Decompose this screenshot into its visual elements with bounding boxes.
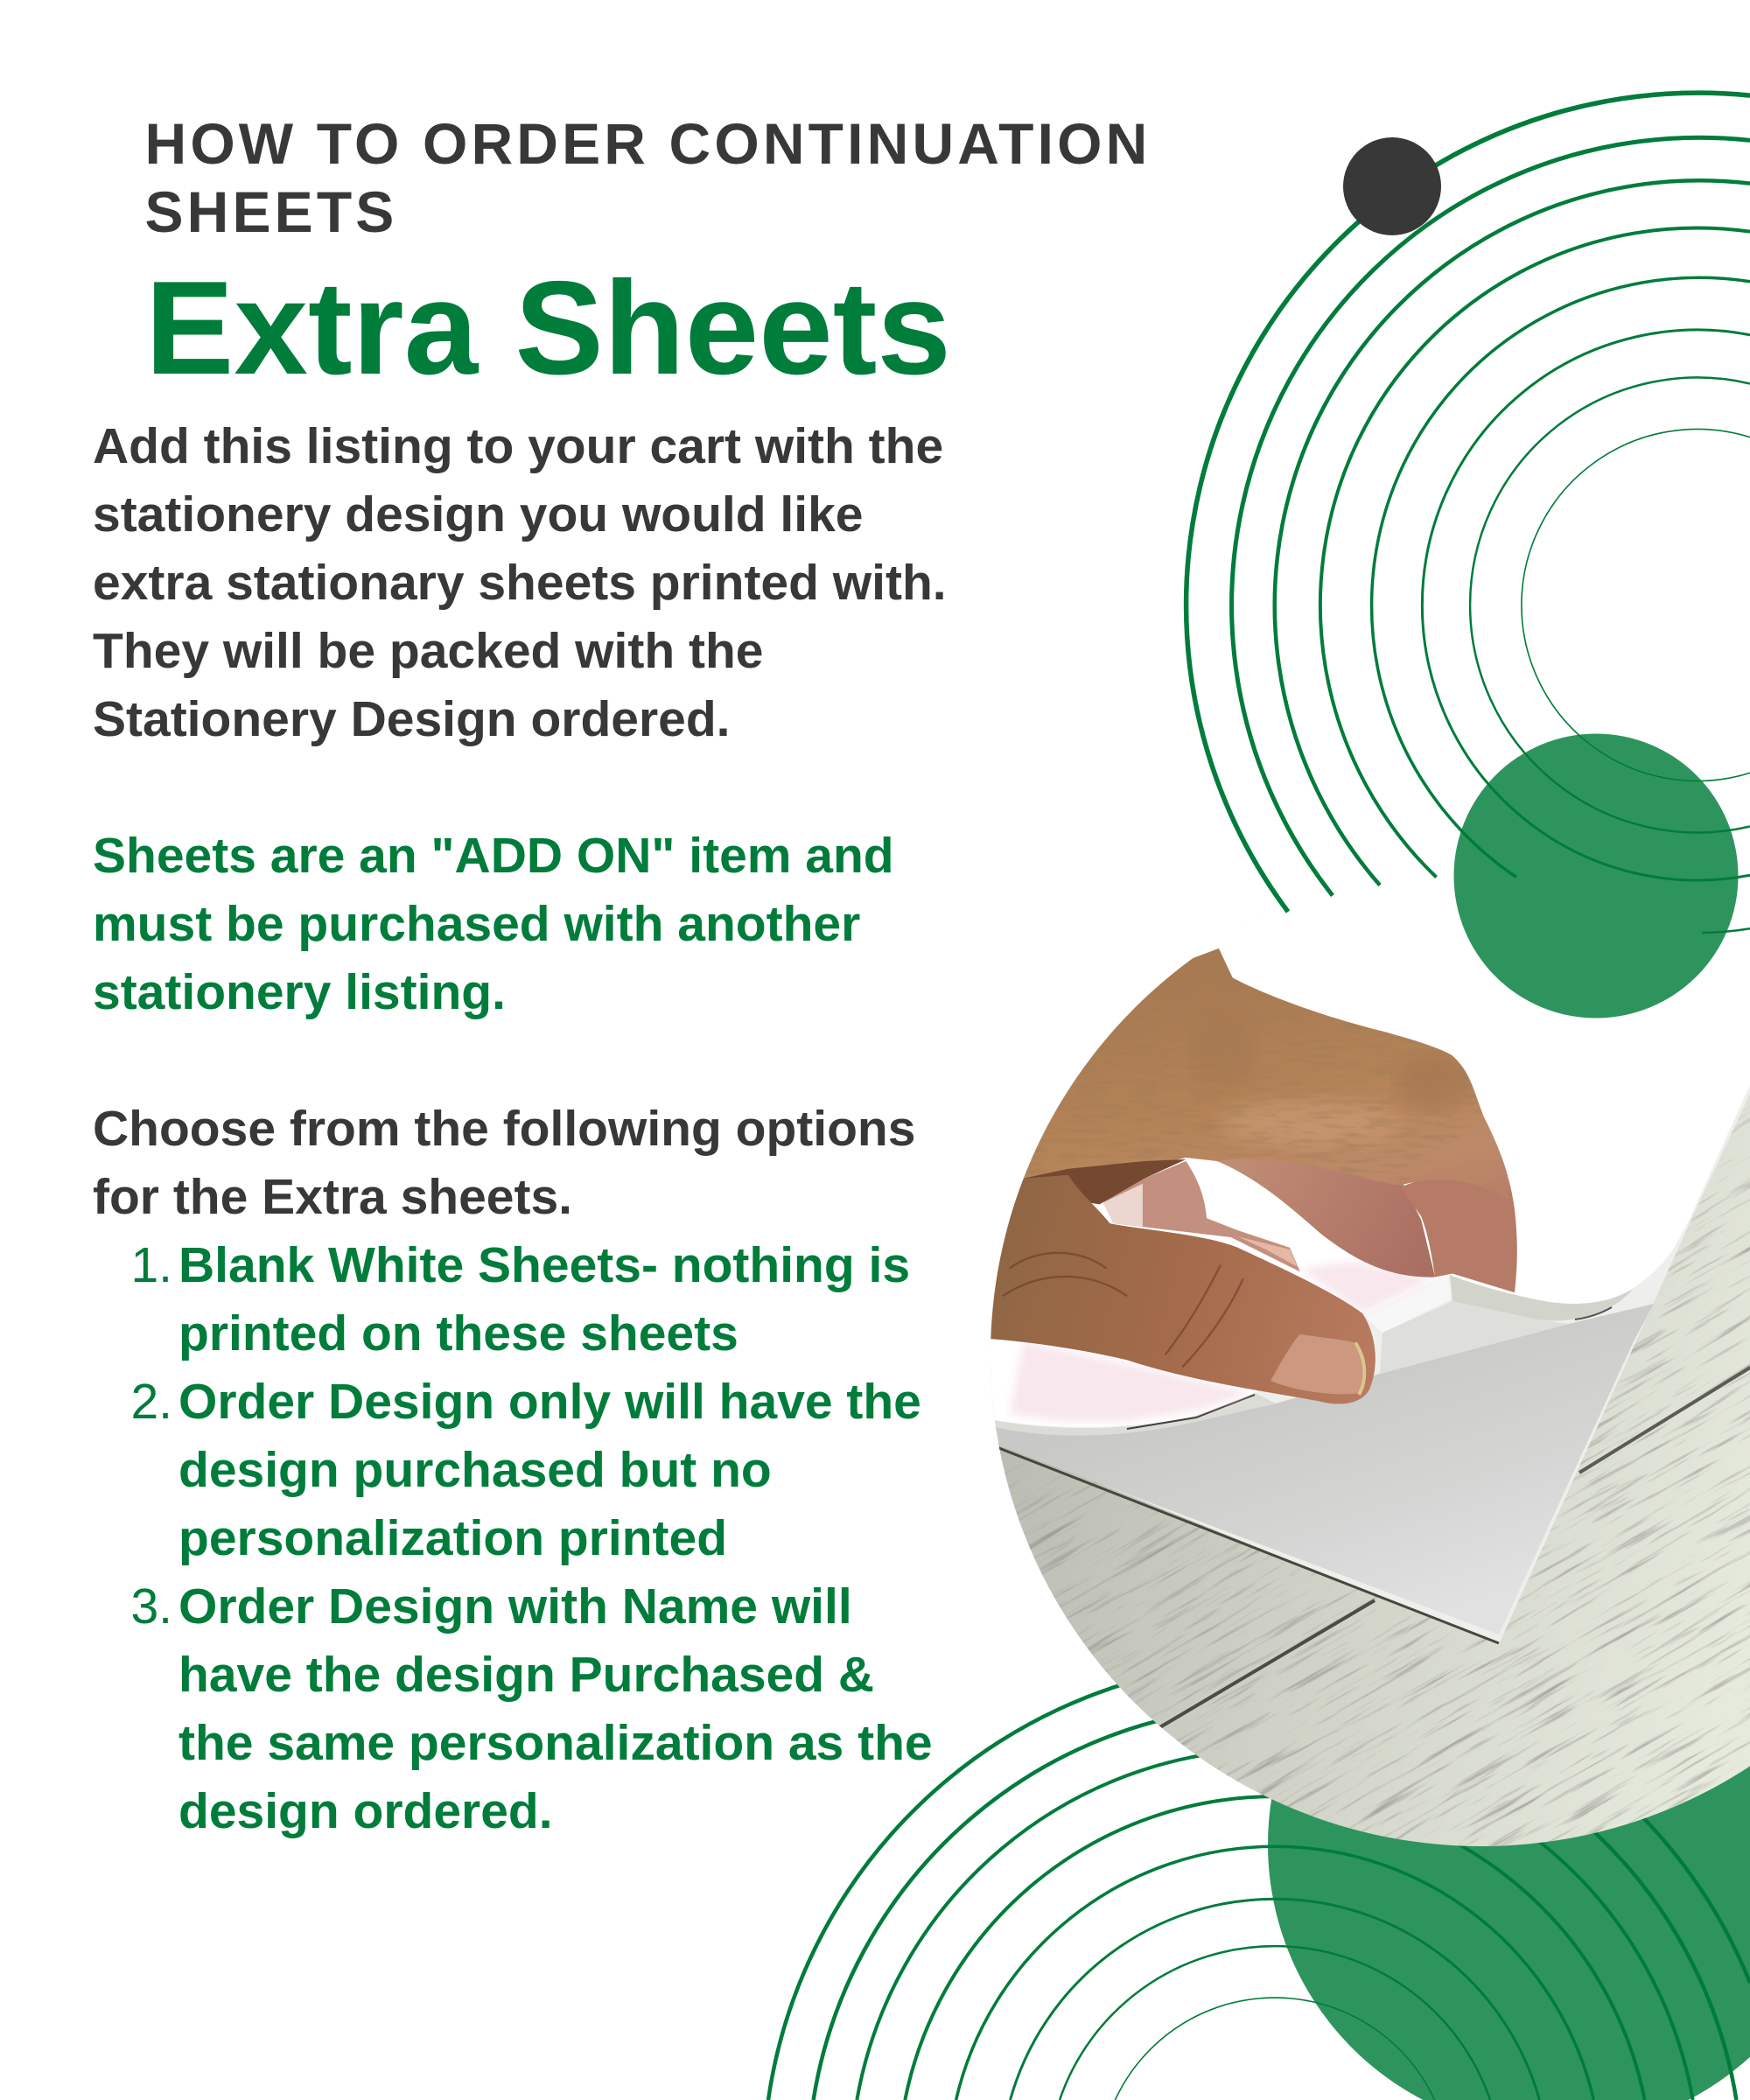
intro paragraph: extra stationary sheets printed with. — [93, 555, 947, 611]
finger shading, clipped to the finger — [1193, 1016, 1474, 1147]
option 2 — [130, 1374, 921, 1566]
option 1 — [130, 1237, 910, 1362]
intro paragraph: stationery design you would like — [93, 486, 863, 542]
add-on note: stationery listing. — [93, 964, 506, 1020]
ring finger — [1401, 1116, 1517, 1292]
wood surface — [989, 1076, 1750, 1846]
option 2: design purchased but no — [178, 1442, 772, 1498]
options intro: Choose from the following options — [93, 1101, 915, 1157]
option 1: printed on these sheets — [178, 1306, 738, 1362]
option 1: 1. — [130, 1237, 172, 1293]
add-on note: Sheets are an "ADD ON" item and — [93, 828, 894, 884]
options intro — [93, 1101, 915, 1225]
option 3: design ordered. — [178, 1783, 553, 1839]
bottom green circle — [1268, 1557, 1750, 2100]
option 3: have the design Purchased & — [178, 1647, 874, 1703]
kicker heading: SHEETS — [145, 178, 397, 243]
option 3: Order Design with Name will — [178, 1578, 852, 1634]
decorative artwork: rings, circles, photo — [766, 90, 1750, 2100]
pad of paper — [990, 1076, 1750, 1645]
option 2: Order Design only will have the — [178, 1374, 921, 1430]
add-on note: must be purchased with another — [93, 896, 860, 952]
intro paragraph: Stationery Design ordered. — [93, 691, 731, 747]
options intro: for the Extra sheets. — [93, 1169, 572, 1225]
kicker heading: HOW TO ORDER CONTINUATION — [145, 110, 1151, 175]
main title: Extra Sheets — [145, 254, 951, 402]
top green circle — [1454, 733, 1738, 1018]
skin wrinkle texture — [1024, 948, 1483, 1186]
intro paragraph: They will be packed with the — [93, 623, 763, 679]
top concentric rings — [1186, 93, 1750, 933]
intro paragraph — [93, 418, 947, 747]
kicker heading — [145, 110, 1151, 243]
option 3: 3. — [130, 1578, 172, 1634]
thumb creases — [1003, 1253, 1243, 1367]
rear finger nail — [1238, 1236, 1298, 1267]
thumb — [975, 1175, 1376, 1404]
nail tip — [1355, 1343, 1364, 1395]
option 1: Blank White Sheets- nothing is — [178, 1237, 910, 1293]
intro paragraph: Add this listing to your cart with the — [93, 418, 943, 474]
option 2: personalization printed — [178, 1510, 727, 1566]
pink reflections on the page — [1010, 1262, 1435, 1421]
shadow between finger and thumb — [1024, 1159, 1186, 1204]
hand — [975, 948, 1517, 1404]
rear finger — [1102, 1161, 1300, 1272]
bottom concentric rings — [768, 1662, 1750, 2100]
options list — [130, 1237, 933, 1839]
top finger — [1024, 948, 1508, 1185]
photo: hand lifting a pad of paper — [975, 875, 1750, 1846]
option 3 — [130, 1578, 933, 1839]
add-on note — [93, 828, 894, 1020]
option 2: 2. — [130, 1374, 172, 1430]
thumb nail — [1270, 1334, 1365, 1394]
middle finger — [1217, 1153, 1435, 1278]
dark dot — [1343, 137, 1441, 235]
option 3: the same personalization as the — [178, 1715, 933, 1771]
